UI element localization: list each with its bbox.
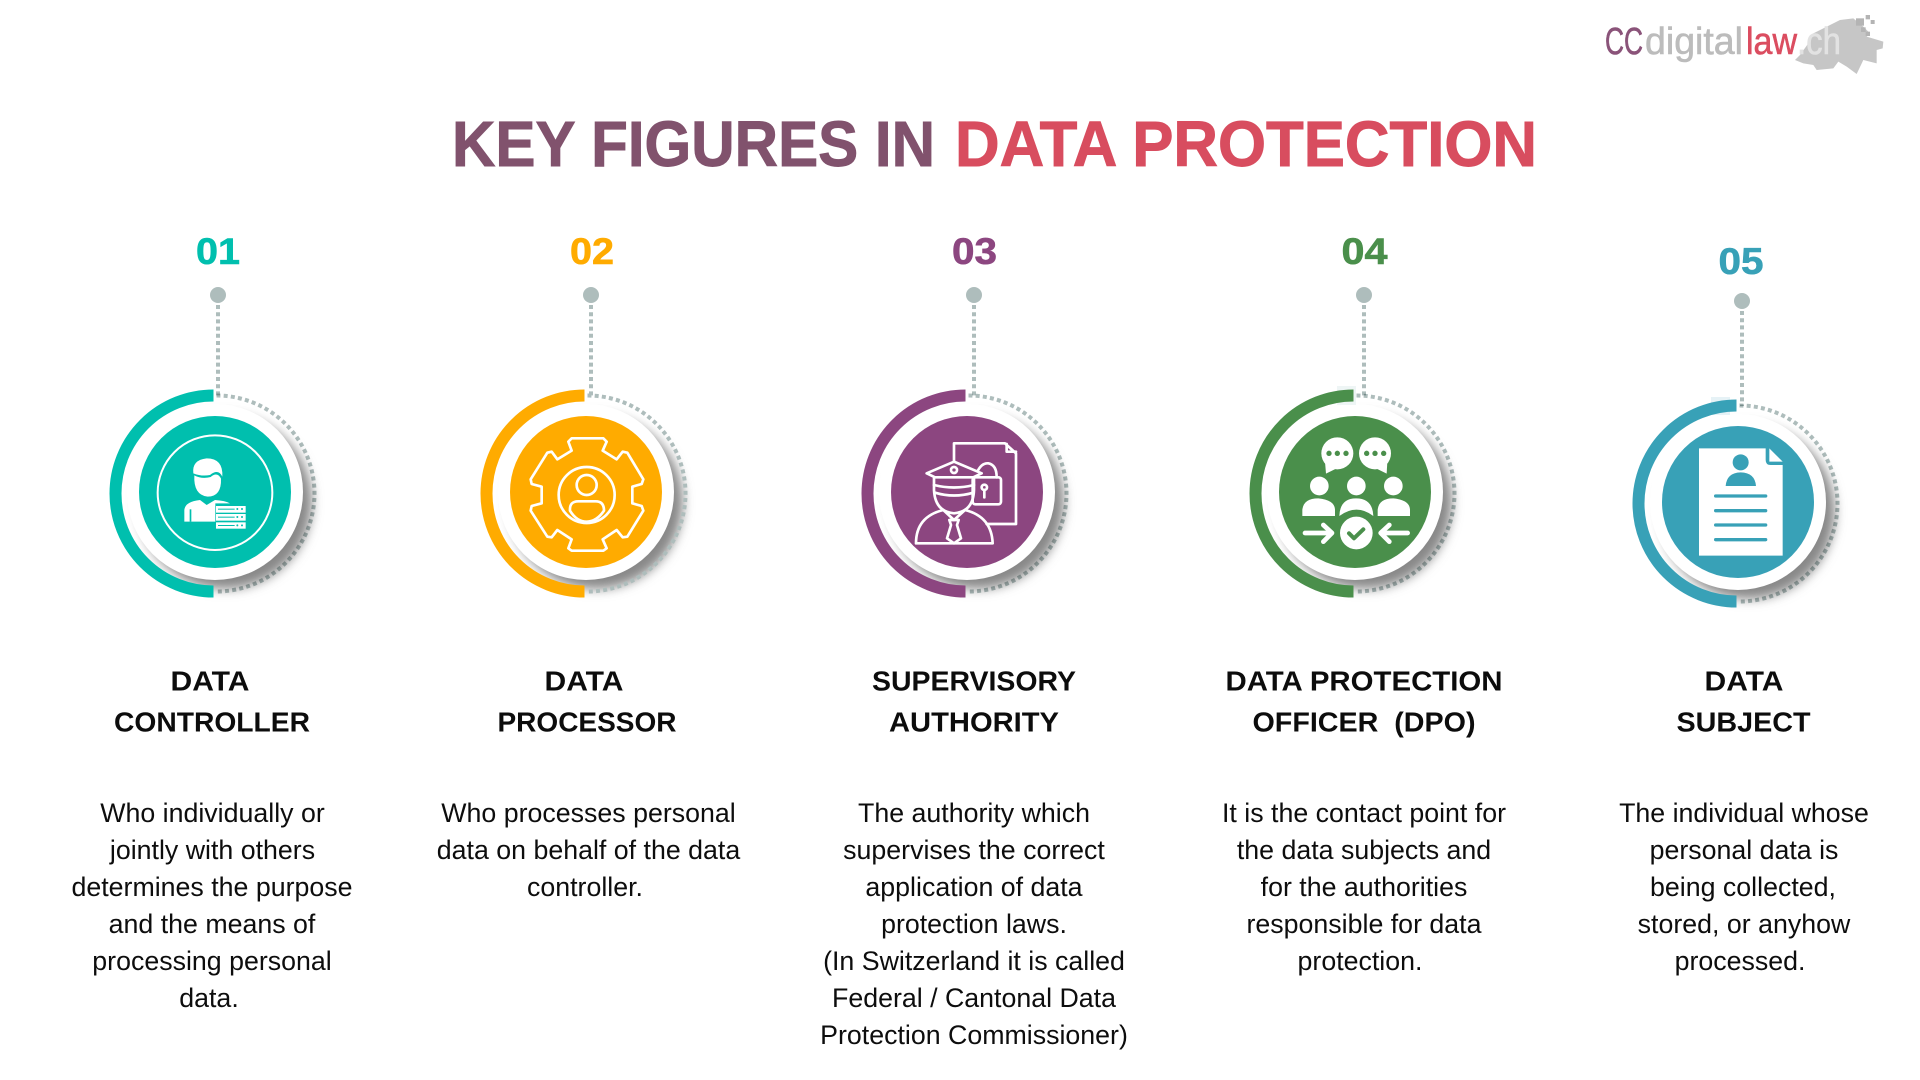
description: application of data <box>865 872 1083 902</box>
heading <box>1226 664 1502 738</box>
description: controller. <box>527 872 643 902</box>
number 03: 03 <box>952 231 997 272</box>
logo wordmark: CC <box>1605 21 1643 63</box>
description: for the authorities <box>1261 872 1467 902</box>
heading <box>498 664 676 738</box>
description <box>1619 798 1869 976</box>
ring with disc <box>867 396 1066 592</box>
logo wordmark: .ch <box>1797 21 1841 63</box>
heading <box>114 664 310 738</box>
description: processed. <box>1675 946 1805 976</box>
description: Who individually or <box>100 798 325 828</box>
heading: DATA <box>544 664 624 696</box>
title: DATA PROTECTION <box>955 108 1537 180</box>
description: stored, or anyhow <box>1638 909 1851 939</box>
heading: CONTROLLER <box>114 706 310 738</box>
description <box>437 798 740 902</box>
connector dot and line <box>1356 287 1372 396</box>
description: and the means of <box>109 909 316 939</box>
connector dot and line <box>1734 293 1750 406</box>
description: protection. <box>1298 946 1422 976</box>
description <box>71 798 353 1013</box>
logo: CCdigitallaw.ch <box>1605 15 1883 74</box>
heading: DATA <box>1704 664 1784 696</box>
title <box>452 108 1537 180</box>
description <box>1222 798 1506 976</box>
panel: 03 supervisory authority <box>820 231 1128 1050</box>
description: The authority which <box>858 798 1090 828</box>
heading: AUTHORITY <box>889 706 1059 738</box>
description: Who processes personal <box>441 798 736 828</box>
heading: DATA PROTECTION <box>1226 664 1502 696</box>
description: processing personal <box>92 946 332 976</box>
heading: DATA <box>170 664 250 696</box>
icon: personal data document <box>1699 448 1783 556</box>
icon: people with speech bubbles and check <box>1302 437 1410 549</box>
ring with disc <box>116 396 314 592</box>
heading: SUPERVISORY <box>872 664 1076 696</box>
panel: 01 data controller <box>71 231 353 1013</box>
number 05: 05 <box>1718 241 1764 282</box>
description: responsible for data <box>1247 909 1482 939</box>
ring with disc <box>1256 386 1454 592</box>
description: The individual whose <box>1619 798 1869 828</box>
description: being collected, <box>1650 872 1836 902</box>
description: jointly with others <box>109 835 315 865</box>
heading: OFFICER (DPO) <box>1252 706 1476 738</box>
description: the data subjects and <box>1237 835 1491 865</box>
logo wordmark: law <box>1746 21 1797 63</box>
number 02: 02 <box>570 231 614 272</box>
description: protection laws. <box>881 909 1067 939</box>
logo wordmark: digital <box>1645 21 1743 63</box>
description: personal data is <box>1650 835 1838 865</box>
number 04: 04 <box>1342 231 1388 272</box>
icon: gear with person <box>531 438 643 551</box>
panel: 05 data subject <box>1619 241 1869 976</box>
heading <box>1676 664 1810 738</box>
number 01: 01 <box>196 231 240 272</box>
icon: map of Switzerland <box>1795 15 1883 74</box>
description: supervises the correct <box>843 835 1105 865</box>
description: data on behalf of the data <box>437 835 740 865</box>
description <box>820 798 1128 1050</box>
heading: SUBJECT <box>1676 706 1810 738</box>
description: It is the contact point for <box>1222 798 1506 828</box>
description: Federal / Cantonal Data <box>832 983 1116 1013</box>
description: Protection Commissioner) <box>820 1020 1128 1050</box>
heading <box>872 664 1076 738</box>
ring with disc <box>1638 397 1838 602</box>
icon: officer with locked document <box>916 443 1016 543</box>
panel: 02 data processor <box>437 231 740 902</box>
connector dot and line <box>210 287 226 396</box>
panel: 04 data protection officer <box>1222 231 1506 976</box>
icon: person with server <box>158 435 272 550</box>
title: KEY FIGURES IN <box>452 108 935 180</box>
logo wordmark <box>1605 21 1841 63</box>
ring with disc <box>486 396 686 592</box>
description: determines the purpose <box>71 872 353 902</box>
connector dot and line <box>966 287 982 396</box>
description: (In Switzerland it is called <box>823 946 1125 976</box>
heading: PROCESSOR <box>498 706 676 738</box>
description: data. <box>179 983 239 1013</box>
connector dot and line <box>583 287 599 396</box>
